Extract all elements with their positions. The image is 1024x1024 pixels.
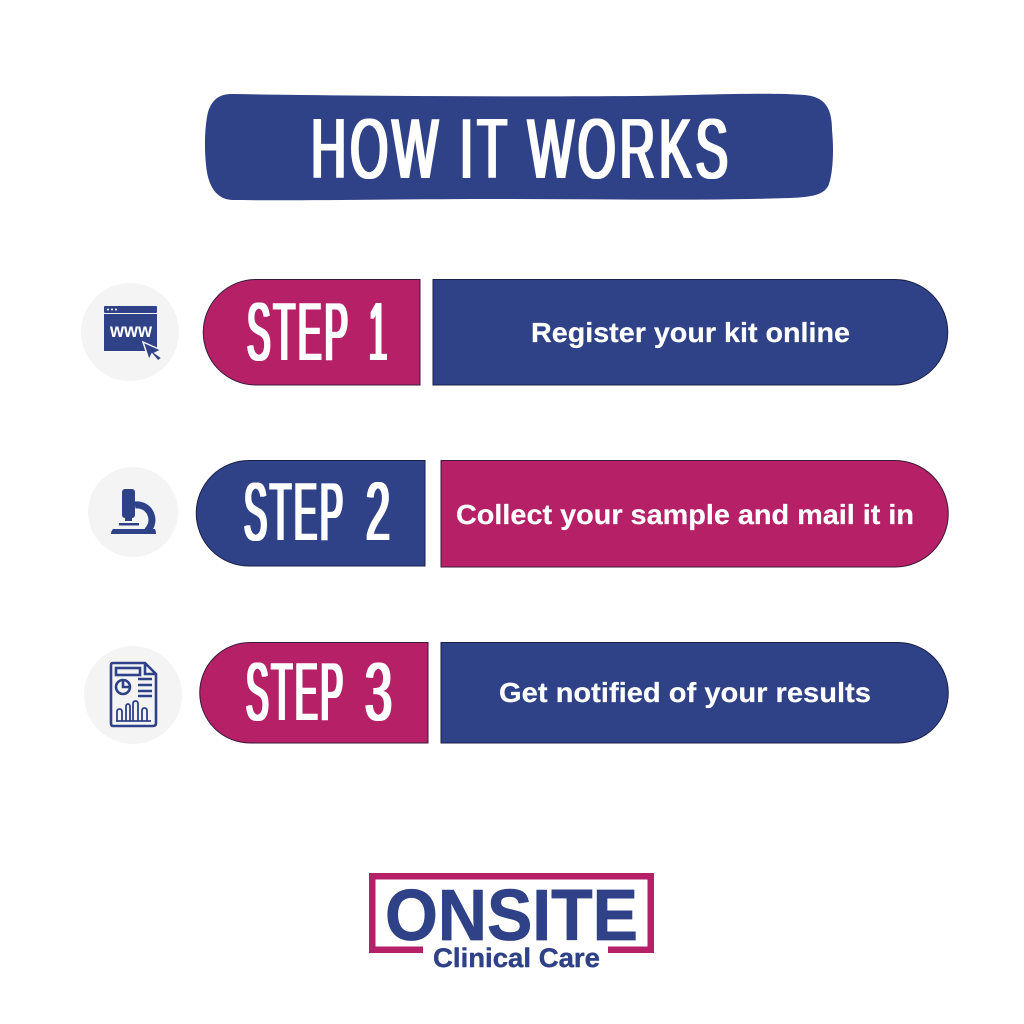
step 1 description: Register your kit online bbox=[531, 317, 850, 348]
step 3 description bbox=[441, 642, 948, 743]
step 2 label bbox=[196, 460, 425, 566]
step 1 label: 1 bbox=[369, 285, 387, 378]
step 3 label bbox=[200, 642, 428, 743]
step 1 row bbox=[81, 280, 948, 385]
step 2 label: STEP bbox=[244, 465, 346, 558]
step 1 label: STEP bbox=[247, 285, 351, 378]
logo: Clinical Care bbox=[433, 943, 600, 973]
icon: web browser with cursor bbox=[81, 283, 179, 381]
logo: ONSITE bbox=[385, 876, 638, 956]
step 2 description: Collect your sample and mail it in bbox=[456, 499, 914, 530]
step 1 label bbox=[203, 280, 420, 385]
step 3 label: 3 bbox=[365, 645, 392, 738]
step 2 label: 2 bbox=[366, 465, 390, 558]
step 3 row bbox=[84, 642, 948, 744]
step 2 description bbox=[441, 460, 948, 567]
step 3 label: STEP bbox=[246, 645, 346, 738]
step 2 row bbox=[88, 460, 948, 567]
step 1 description bbox=[433, 280, 948, 385]
title banner bbox=[205, 94, 833, 200]
step 3 description: Get notified of your results bbox=[499, 677, 871, 708]
icon: report document bbox=[84, 646, 182, 744]
icon: microscope bbox=[88, 467, 178, 557]
title text: HOW IT WORKS bbox=[311, 102, 732, 197]
icon: web browser with cursor: www bbox=[109, 321, 152, 342]
